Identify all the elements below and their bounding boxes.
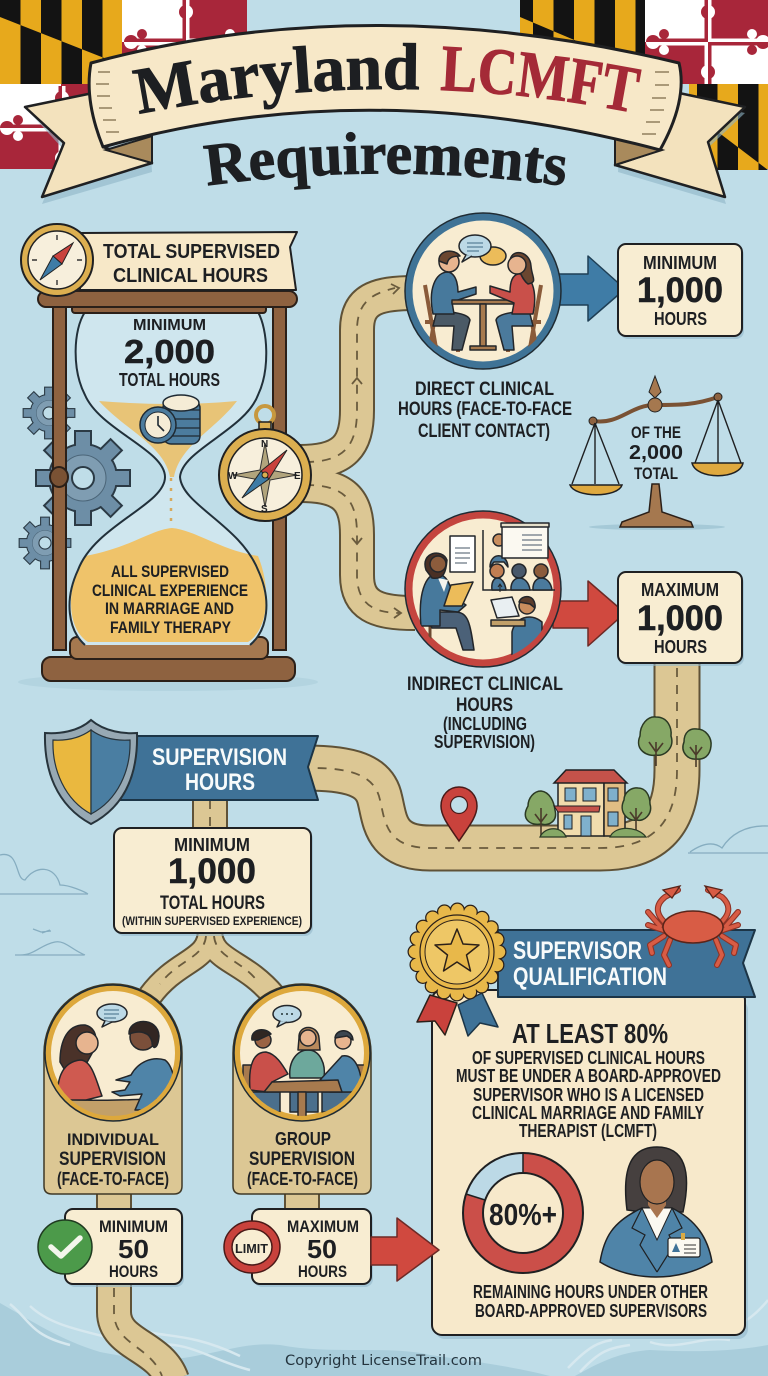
glass outline (70, 312, 266, 645)
glass (70, 312, 266, 645)
icon: large compass: W (228, 471, 238, 482)
box: total supervision hours: 1,000 (168, 852, 256, 891)
icon: large compass (219, 406, 311, 521)
title: Maryland LCMFT: Maryland (132, 42, 420, 114)
icon: limit badge (224, 1221, 280, 1273)
label (398, 379, 572, 442)
ribbon: SUPERVISION (152, 744, 287, 771)
left tail (25, 93, 152, 197)
title banner (24, 24, 746, 204)
arrow: to supervisor panel (371, 1218, 439, 1281)
icon: limit badge: LIMIT (235, 1241, 268, 1256)
headline: AT LEAST 80% (512, 1018, 668, 1049)
scenery: trees and house (525, 717, 711, 837)
label: INDIRECT CLINICAL (407, 674, 563, 695)
maximum 50 box: HOURS (298, 1262, 347, 1281)
donut chart: 80%+: 80%+ (489, 1197, 557, 1232)
icon: green check (38, 1220, 92, 1274)
icon: small compass (21, 224, 93, 296)
icon: balance scale with text: 2,000 (629, 442, 683, 464)
minimum box (618, 244, 744, 339)
minimum 50 box: 50 (118, 1234, 149, 1264)
house (554, 770, 627, 836)
panel: individual supervision (38, 984, 184, 1287)
box: total supervision hours: (WITHIN SUPERVISED EXPERIENCE) (122, 914, 302, 928)
road: to supervision banner (305, 660, 677, 848)
remaining hours text (473, 1282, 708, 1321)
road: forks from compass (300, 284, 415, 618)
falling grains (170, 478, 172, 525)
minimum box: MINIMUM (643, 253, 717, 273)
maximum 50 box: MAXIMUM (287, 1217, 359, 1236)
total hours banner: CLINICAL HOURS (113, 265, 268, 287)
label: HOURS (456, 695, 513, 716)
hourglass: TOTAL HOURS (119, 370, 220, 390)
tree (622, 788, 651, 834)
total hours banner: TOTAL SUPERVISED (103, 241, 280, 263)
label: SUPERVISION) (434, 732, 535, 752)
tree (525, 791, 556, 836)
icon: large compass: N (261, 439, 268, 450)
icon: crab (648, 886, 738, 965)
water waves (0, 1300, 768, 1376)
top cap (72, 304, 266, 313)
minimum 50 box (65, 1209, 184, 1287)
qualification text: THERAPIST (LCMFT) (519, 1121, 657, 1141)
label (57, 1130, 169, 1189)
gears (19, 387, 130, 569)
hourglass: 2,000 (124, 333, 215, 370)
label: DIRECT CLINICAL (415, 379, 554, 400)
label: GROUP (275, 1129, 331, 1149)
title banner: LCMFT (440, 46, 642, 112)
icon: large compass: E (294, 471, 301, 482)
tree (683, 729, 711, 767)
label: HOURS (FACE-TO-FACE (398, 399, 572, 420)
tree (639, 717, 672, 766)
bushes (540, 828, 646, 837)
blue arrow (555, 256, 625, 321)
experience text: FAMILY THERAPY (110, 618, 232, 637)
icon: balance scale with text (570, 376, 743, 530)
minimum box: HOURS (654, 309, 707, 329)
qualification text (456, 1048, 721, 1141)
icon: shield (45, 720, 137, 824)
road: supervision trunk and fork (150, 798, 274, 996)
panel: direct clinical hours (398, 213, 744, 442)
panel: supervisor qualification (415, 886, 755, 1339)
hours text: MINIMUM (133, 317, 206, 334)
qualification text: SUPERVISOR WHO IS A LICENSED (473, 1085, 704, 1105)
main ribbon (89, 26, 681, 150)
minimum box: 1,000 (637, 271, 723, 310)
lower plate (42, 657, 295, 681)
illustration: group at table (234, 985, 370, 1122)
total hours banner (80, 232, 297, 290)
experience text: ALL SUPERVISED (111, 562, 229, 581)
label (407, 674, 563, 752)
label: INDIVIDUAL (67, 1130, 159, 1149)
hourglass (18, 291, 318, 691)
maximum box: MAXIMUM (641, 580, 719, 600)
label: SUPERVISION (59, 1149, 166, 1170)
label: (INCLUDING (443, 714, 527, 734)
ribbon (115, 736, 318, 800)
posts (53, 300, 66, 650)
title: Requirements: Requirements (202, 132, 566, 190)
Maryland flag, left (0, 0, 248, 170)
stack of clocks (140, 395, 200, 444)
panel: group supervision (224, 984, 373, 1287)
icon: gold medal (415, 910, 499, 1036)
donut chart: 80%+ (463, 1153, 583, 1273)
label: (FACE-TO-FACE) (247, 1169, 358, 1189)
red arrow (553, 581, 625, 646)
ribbon folds (106, 136, 662, 165)
maximum box (618, 572, 744, 666)
maximum 50 box (252, 1209, 373, 1287)
right tail (615, 93, 745, 197)
box: total supervision hours: MINIMUM (174, 835, 250, 855)
icon: balance scale with text: OF THE (631, 423, 681, 442)
top sand (99, 401, 237, 477)
box: total supervision hours: TOTAL HOURS (160, 893, 265, 914)
copyright: Copyright LicenseTrail.com (285, 1353, 482, 1369)
ribbon: SUPERVISOR (513, 937, 642, 965)
minimum 50 box: MINIMUM (99, 1217, 168, 1236)
illustration: counselling pair (405, 213, 561, 369)
experience text: CLINICAL EXPERIENCE (92, 581, 248, 600)
illustration: one-on-one (45, 985, 181, 1125)
illustration: indirect activities (405, 511, 561, 667)
parchment (432, 990, 748, 1339)
clouds (0, 826, 768, 955)
base shadow (18, 673, 318, 691)
ribbon (498, 930, 755, 997)
label: CLIENT CONTACT) (418, 421, 550, 442)
icon: map pin (441, 787, 477, 841)
label: SUPERVISION (249, 1149, 355, 1170)
ribbon: QUALIFICATION (513, 963, 667, 991)
label: (FACE-TO-FACE) (57, 1169, 169, 1189)
icon: balance scale with text: TOTAL (634, 464, 678, 483)
maximum box: 1,000 (637, 599, 723, 638)
maximum 50 box: 50 (307, 1234, 337, 1264)
experience text (92, 562, 248, 637)
experience text: IN MARRIAGE AND (105, 599, 234, 618)
minimum 50 box: HOURS (109, 1262, 158, 1281)
Maryland flag, right (520, 0, 768, 170)
ribbon: HOURS (185, 769, 255, 796)
icon: large compass: S (261, 504, 268, 515)
panel: supervision hours (45, 720, 318, 936)
icon: licensed supervisor (600, 1147, 712, 1277)
road: bottom stems (114, 1190, 302, 1376)
box: total supervision hours (114, 828, 313, 936)
label (247, 1129, 358, 1189)
panel: indirect clinical hours (405, 511, 744, 752)
qualification text: CLINICAL MARRIAGE AND FAMILY (472, 1103, 704, 1123)
qualification text: OF SUPERVISED CLINICAL HOURS (472, 1048, 705, 1068)
maximum box: HOURS (654, 637, 707, 657)
bottom sand (71, 528, 266, 642)
